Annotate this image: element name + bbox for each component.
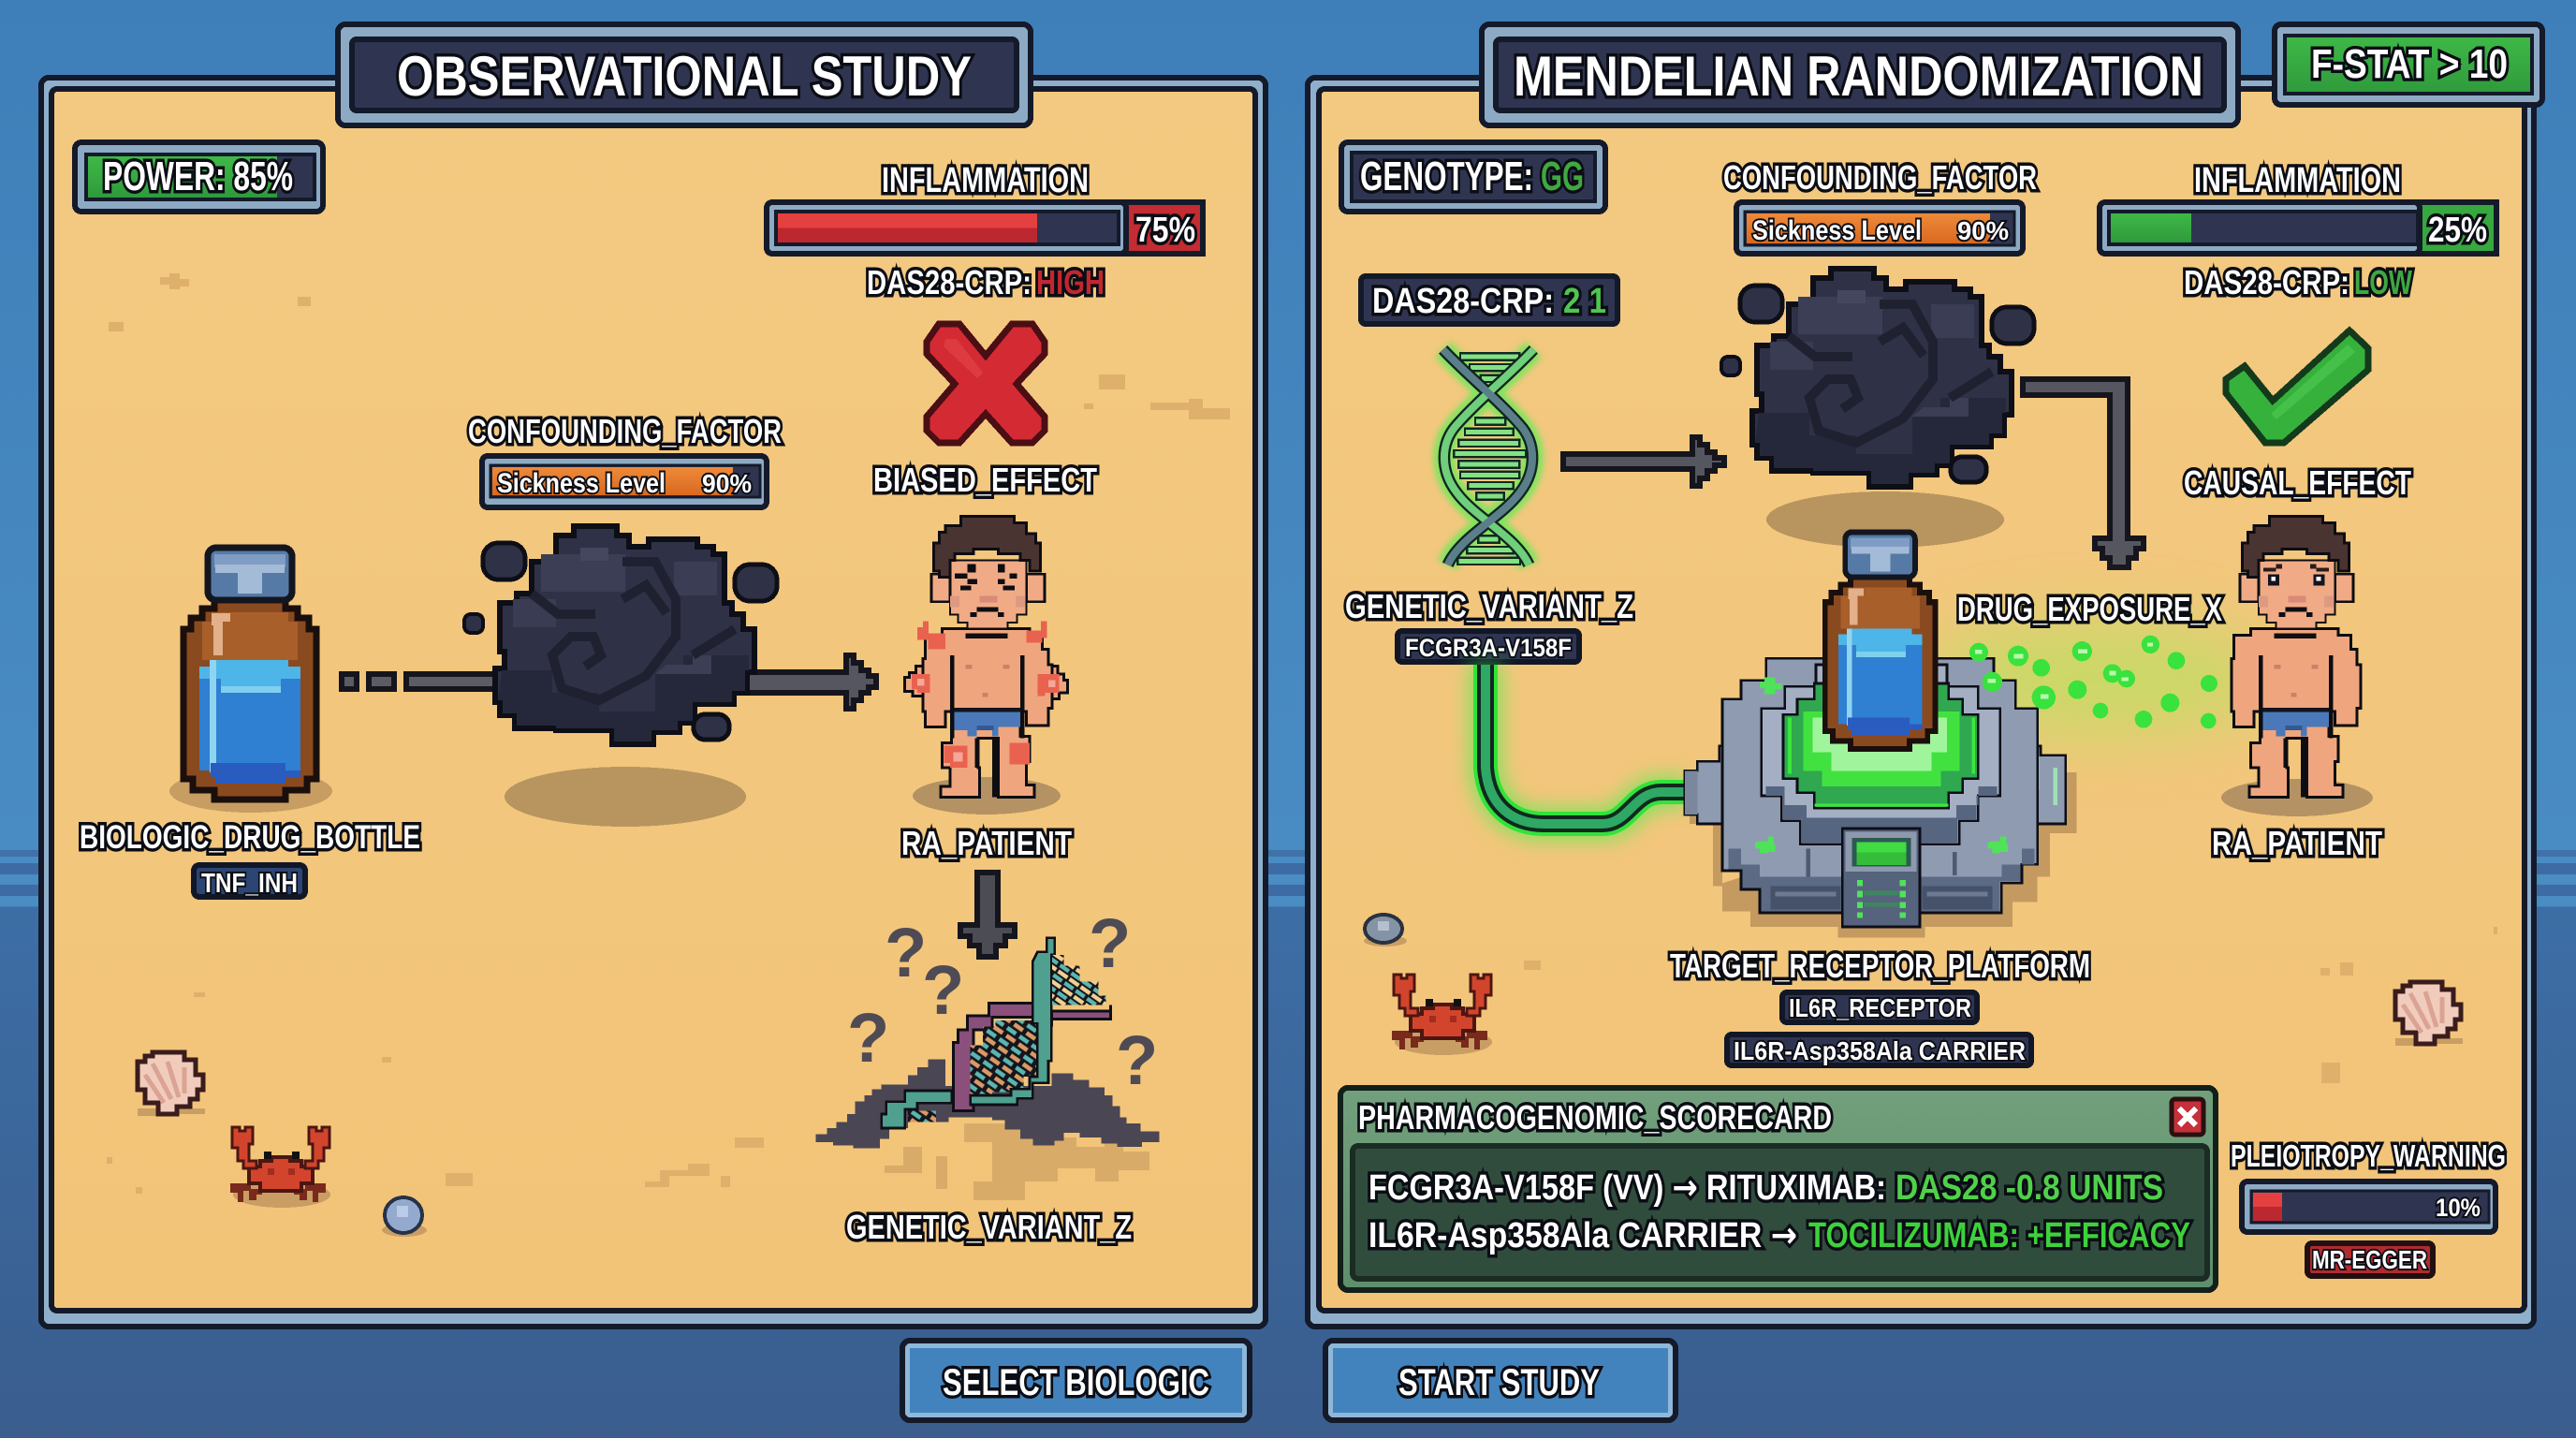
button: select biologic: SELECT BIOLOGIC [943, 1362, 1209, 1403]
confounding factor label and bar: CONFOUNDING_FACTOR [468, 412, 782, 450]
icon: RA patient healthy [2232, 517, 2361, 798]
genotype badge: GENOTYPE: [1360, 154, 1533, 199]
icon: glowing DNA helix [1443, 349, 1533, 565]
F-stat badge [2275, 24, 2542, 105]
label: genetic variant right [1345, 587, 1633, 662]
arrow: confounder to patient [739, 655, 876, 709]
pharmacogenomic scorecard: FCGR3A-V158F (VV) → RITUXIMAB: [1368, 1167, 1886, 1208]
power badge: POWER: 85% [103, 154, 293, 199]
button: start study [1325, 1341, 1676, 1420]
question marks: ? [885, 914, 927, 991]
F-stat badge: F-STAT > 10 [2311, 41, 2508, 87]
icon: crab right [1392, 975, 1492, 1055]
pharmacogenomic scorecard: PHARMACOGENOMIC_SCORECARD [1358, 1098, 1832, 1137]
pharmacogenomic scorecard: TOCILIZUMAB: +EFFICACY [1808, 1216, 2190, 1255]
sand specks right [1524, 927, 2497, 1083]
question marks: ? [1116, 1021, 1158, 1099]
confounding factor label and bar right [1723, 158, 2037, 254]
particles: drug exposure [1969, 636, 2217, 728]
icon: green check causal [2226, 330, 2368, 443]
shadow under cloud [505, 767, 746, 827]
DAS28 score badge: DAS28-CRP: [1372, 282, 1554, 321]
icon: pebble left [382, 1197, 427, 1237]
label: genetic variant right: FCGR3A-V158F [1405, 634, 1572, 662]
icon: broken dna in pile [816, 938, 1159, 1149]
inflammation meter: INFLAMMATION [882, 161, 1089, 200]
badge: IL6R receptor: IL6R_RECEPTOR [1789, 993, 1971, 1022]
title: observational study [338, 24, 1031, 125]
sand disturbance [885, 1123, 1149, 1200]
arrow: confounder to exposure [2023, 379, 2144, 567]
panel frame right [1308, 78, 2534, 1327]
icon: shell right [2395, 982, 2463, 1046]
pharmacogenomic scorecard: IL6R-Asp358Ala CARRIER → [1368, 1214, 1797, 1255]
pharmacogenomic scorecard [1340, 1088, 2216, 1290]
inflammation meter right: DAS28-CRP: [2184, 263, 2349, 301]
sand specks [107, 273, 1230, 1194]
icon: crab left [230, 1127, 330, 1208]
label: biologic drug bottle: BIOLOGIC_DRUG_BOTTLE [80, 819, 420, 856]
label: biologic drug bottle: TNF_INH [201, 869, 298, 899]
confounding factor label and bar [468, 412, 782, 507]
question marks: ? [847, 999, 889, 1077]
shadow under cloud right [1766, 492, 2004, 548]
icon: bottle shadow [169, 770, 332, 813]
panel frame left [41, 78, 1266, 1327]
title: mendelian randomization [1482, 24, 2238, 125]
icon: patient shadow right [2221, 779, 2373, 816]
icon: dark cloud right [1721, 269, 2034, 487]
inflammation meter: HIGH [1036, 263, 1105, 301]
label: genetic variant left: GENETIC_VARIANT_Z [846, 1208, 1132, 1246]
panel: mendelian randomization [1308, 24, 2542, 1327]
genotype badge [1341, 142, 1605, 212]
inflammation meter right [2100, 161, 2496, 301]
confounding factor label and bar right: 90% [1957, 216, 2009, 245]
inflammation meter [767, 161, 1203, 301]
confounding factor label and bar: Sickness Level [497, 468, 666, 499]
inflammation meter right: LOW [2354, 263, 2412, 301]
confounding factor label and bar: 90% [702, 469, 752, 498]
glowing cable [1486, 665, 1685, 824]
icon: bottle on platform [1825, 532, 1936, 749]
pleiotropy warning [2231, 1138, 2506, 1276]
target receptor platform [1685, 658, 2076, 938]
label: biologic drug bottle [80, 819, 420, 899]
inflammation meter right: INFLAMMATION [2194, 161, 2401, 200]
label: causal effect: CAUSAL_EFFECT [2184, 463, 2411, 502]
button: start study: START STUDY [1398, 1362, 1600, 1403]
question marks: ? [1089, 904, 1131, 982]
arrow: variant to confounder [1563, 437, 1724, 486]
icon: dark cloud confounder [464, 526, 777, 744]
arrow: drug to confounder dashed [342, 674, 509, 689]
badge: IL6R carrier: IL6R-Asp358Ala CARRIER [1734, 1036, 2026, 1065]
label: RA patient: RA_PATIENT [901, 824, 1072, 862]
confounding factor label and bar right: Sickness Level [1752, 215, 1922, 246]
DAS28 score badge [1361, 276, 1617, 324]
title: observational study: OBSERVATIONAL STUDY [397, 45, 972, 108]
genotype badge: GG [1541, 154, 1584, 199]
icon: patient shadow [913, 777, 1061, 814]
icon: biologic drug bottle [183, 548, 316, 800]
arrow: patient to genetic variant [960, 873, 1015, 957]
title: mendelian randomization: MENDELIAN RANDOMIZATION [1514, 45, 2203, 108]
label: target receptor platform: TARGET_RECEPTOR_PLATFORM [1670, 946, 2090, 985]
label: biased effect: BIASED_EFFECT [873, 461, 1097, 499]
panel: observational study [41, 24, 1266, 1327]
question marks [847, 904, 1158, 1099]
pleiotropy warning: MR-EGGER [2312, 1245, 2427, 1274]
power badge [75, 142, 323, 212]
inflammation meter right: 25% [2428, 211, 2487, 250]
label: genetic variant right: GENETIC_VARIANT_Z [1345, 587, 1633, 625]
confounding factor label and bar right: CONFOUNDING_FACTOR [1723, 158, 2037, 197]
drug exposure haze [1919, 621, 2275, 737]
icon: shell left [138, 1052, 205, 1116]
pleiotropy warning: 10% [2436, 1194, 2481, 1222]
DAS28 score badge: 2 1 [1563, 282, 1606, 321]
question marks: ? [922, 951, 964, 1029]
icon: red X biased [927, 324, 1045, 443]
inflammation meter: DAS28-CRP: [867, 263, 1032, 301]
label: RA patient right: RA_PATIENT [2212, 824, 2382, 862]
label: drug exposure: DRUG_EXPOSURE_X [1957, 590, 2222, 628]
inflammation meter: 75% [1135, 211, 1195, 250]
icon: pebble right [1364, 915, 1407, 946]
button: select biologic [902, 1341, 1250, 1420]
icon: RA patient inflamed [905, 517, 1068, 798]
pharmacogenomic scorecard: DAS28 -0.8 UNITS [1895, 1168, 2163, 1208]
